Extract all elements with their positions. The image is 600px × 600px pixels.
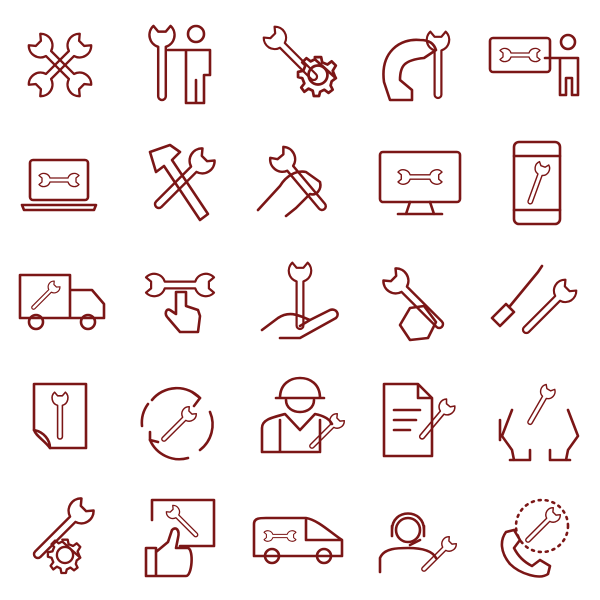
- icon: hand gripping wrench: [381, 266, 451, 340]
- icon: helmet and wrench: [383, 32, 449, 100]
- icon: two hands and wrench: [500, 383, 578, 460]
- icon: hand under wrench: [262, 263, 338, 338]
- icon: van with wrench: [254, 518, 342, 563]
- icon: person with wrench: [149, 26, 210, 103]
- icon: wrench and gear: [26, 496, 96, 573]
- icon: wrench with pointing hand: [146, 274, 214, 332]
- icon: headset operator: [380, 514, 458, 576]
- icon: thumbs up with board: [146, 500, 214, 576]
- icon: phone call with wrench: [502, 500, 568, 576]
- icon: screwdriver and wrench: [492, 266, 579, 340]
- icon: wrench and gear: [261, 24, 336, 96]
- icon: crossed wrenches: [26, 31, 94, 99]
- icon: hand holding wrench: [258, 144, 334, 217]
- icon: truck with wrench: [20, 275, 104, 329]
- icon: presentation board: [490, 35, 578, 95]
- icon: circular arrows wrench: [142, 388, 213, 459]
- icon: worker with helmet: [262, 378, 346, 453]
- icon: monitor with wrench: [380, 152, 460, 214]
- icon: phone with wrench: [514, 142, 560, 224]
- icon: laptop with wrench: [22, 160, 96, 210]
- icon: hammer and wrench: [147, 145, 217, 220]
- icon: document with wrench: [34, 384, 86, 448]
- icon: document with lines and wrench: [384, 384, 457, 456]
